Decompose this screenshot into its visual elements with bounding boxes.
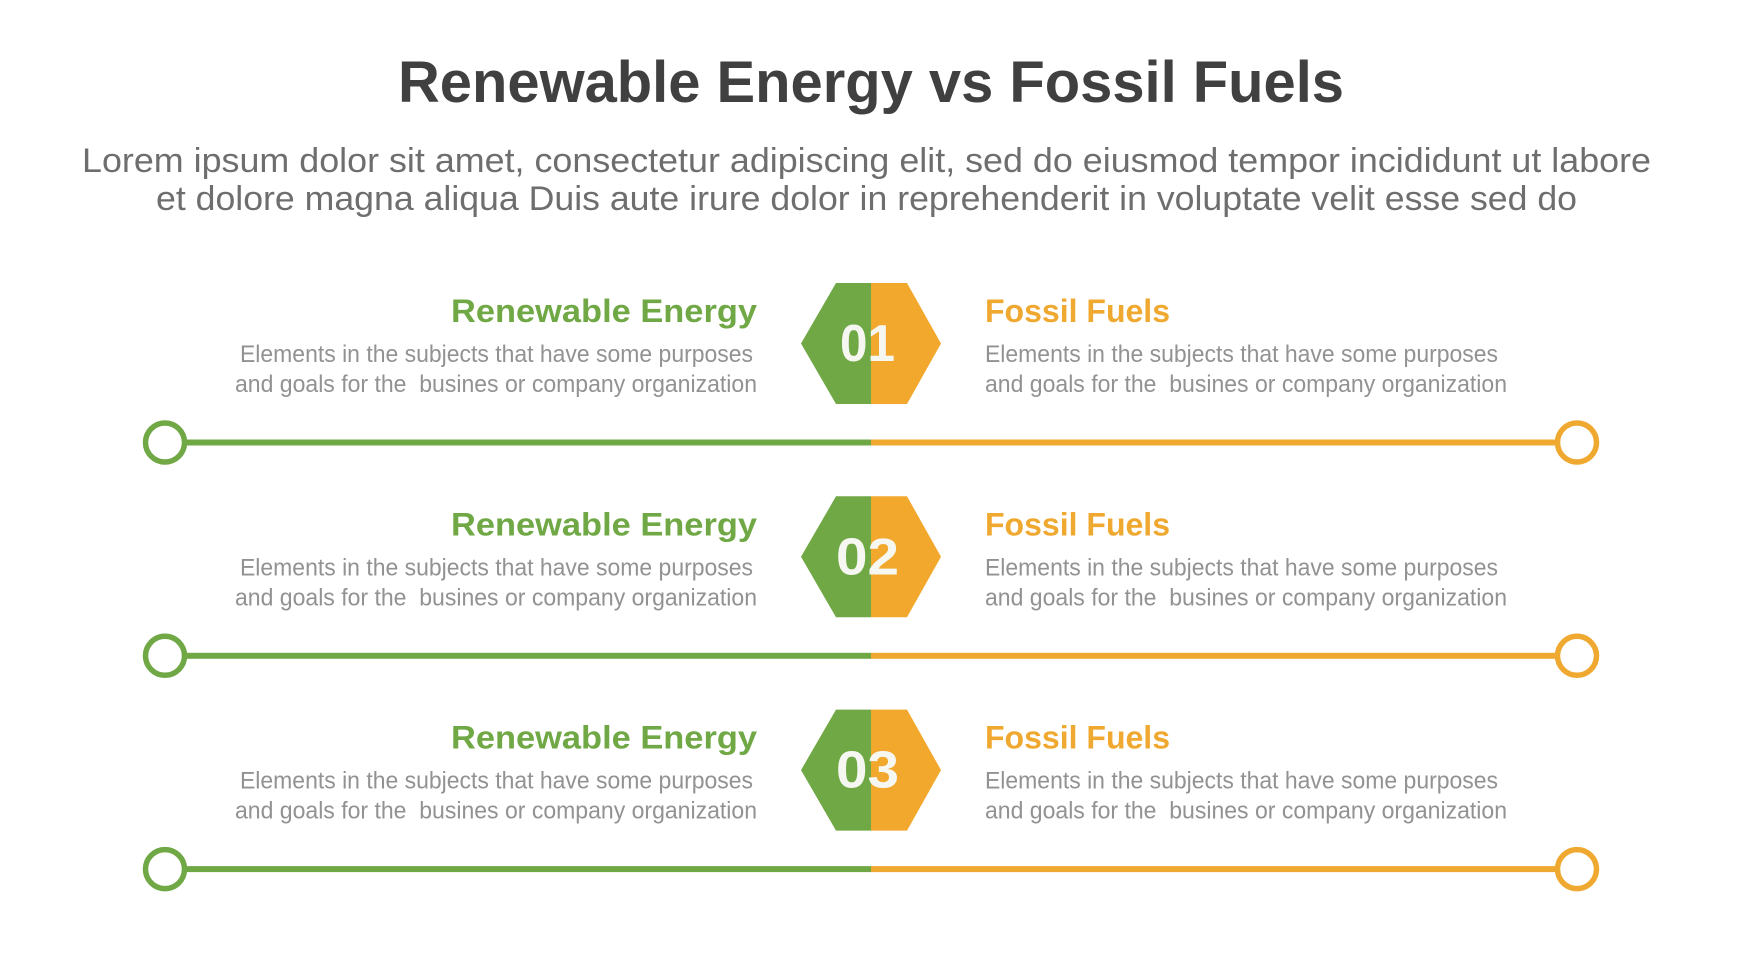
fossil fuels description 2: Elements in the subjects that have some purposes bbox=[985, 554, 1498, 581]
hexagon badge 02 bbox=[801, 496, 941, 617]
subtitle text: Lorem ipsum dolor sit amet, consectetur adipiscing elit, sed do eiusmod tempor incididunt ut labore bbox=[82, 142, 1651, 180]
fossil fuels description 1: and goals for the busines or company organization bbox=[985, 371, 1507, 398]
row 2 bbox=[146, 496, 1596, 675]
fossil fuels description 3: and goals for the busines or company organization bbox=[985, 798, 1507, 825]
timeline 3 bbox=[146, 850, 1596, 889]
timeline 1 bbox=[146, 423, 1596, 462]
subtitle text: et dolore magna aliqua Duis aute irure dolor in reprehenderit in voluptate velit esse sed do bbox=[156, 180, 1577, 218]
subtitle text bbox=[82, 142, 1651, 218]
fossil fuels description 3: Elements in the subjects that have some purposes bbox=[985, 768, 1498, 795]
fossil fuels description 2: and goals for the busines or company organization bbox=[985, 584, 1507, 611]
renewable energy description 2 bbox=[235, 554, 757, 611]
renewable energy description 1 bbox=[235, 341, 757, 398]
renewable energy description 1: and goals for the busines or company organization bbox=[235, 371, 757, 398]
hexagon badge 03: 03 bbox=[836, 742, 899, 800]
renewable energy description 3 bbox=[235, 768, 757, 825]
renewable energy heading 3: Renewable Energy bbox=[451, 720, 757, 756]
row 1 bbox=[146, 283, 1596, 462]
fossil fuels heading 3: Fossil Fuels bbox=[985, 720, 1170, 756]
renewable energy heading 1: Renewable Energy bbox=[451, 293, 757, 329]
hexagon badge 01 bbox=[801, 283, 941, 404]
fossil fuels description 1 bbox=[985, 341, 1507, 398]
fossil fuels heading 2: Fossil Fuels bbox=[985, 506, 1170, 542]
fossil fuels description 2 bbox=[985, 554, 1507, 611]
fossil fuels description 1: Elements in the subjects that have some purposes bbox=[985, 341, 1498, 368]
renewable energy description 1: Elements in the subjects that have some purposes bbox=[240, 341, 753, 368]
row 3 bbox=[146, 710, 1596, 889]
renewable energy description 3: and goals for the busines or company organization bbox=[235, 798, 757, 825]
renewable energy description 3: Elements in the subjects that have some purposes bbox=[240, 768, 753, 795]
renewable energy description 2: Elements in the subjects that have some purposes bbox=[240, 554, 753, 581]
fossil fuels description 3 bbox=[985, 768, 1507, 825]
timeline 2 bbox=[146, 636, 1596, 675]
hexagon badge 02: 02 bbox=[836, 528, 899, 586]
fossil fuels heading 1: Fossil Fuels bbox=[985, 293, 1170, 329]
hexagon badge 03 bbox=[801, 710, 941, 831]
renewable energy description 2: and goals for the busines or company organization bbox=[235, 584, 757, 611]
hexagon badge 01: 01 bbox=[840, 315, 895, 373]
renewable energy heading 2: Renewable Energy bbox=[451, 506, 757, 542]
title: Renewable Energy vs Fossil Fuels bbox=[398, 50, 1344, 115]
